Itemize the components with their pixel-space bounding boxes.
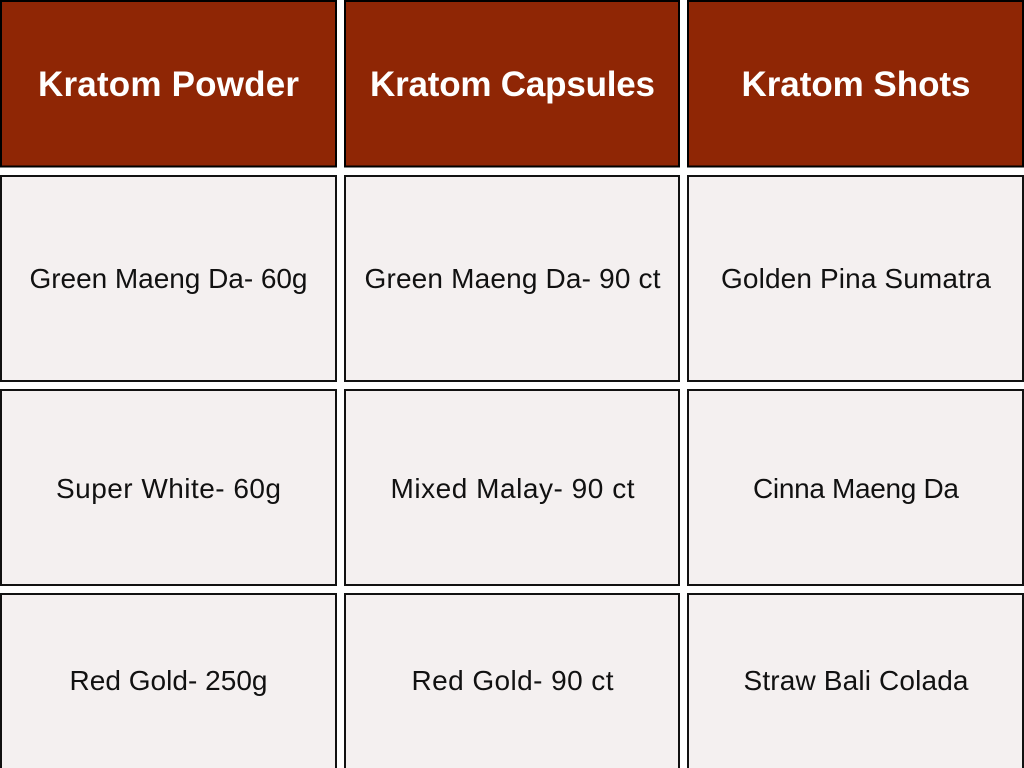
cell: Super White 60g: Super White- 60g	[56, 473, 281, 504]
cell: Green Maeng Da 60g: Green Maeng Da- 60g	[30, 263, 308, 294]
cell: Red Gold 250g: Red Gold- 250g	[70, 665, 268, 696]
cell: Straw Bali Colada	[688, 594, 1023, 768]
cell: Green Maeng Da 90 ct	[345, 176, 679, 381]
cell: Golden Pina Sumatra: Golden Pina Sumatra	[721, 263, 991, 294]
cell: Red Gold 90 ct	[345, 594, 679, 768]
header: Kratom Shots: Kratom Shots	[742, 65, 970, 104]
cell: Straw Bali Colada: Straw Bali Colada	[744, 665, 969, 696]
cell: Golden Pina Sumatra	[688, 176, 1023, 381]
cell: Green Maeng Da 60g	[1, 176, 336, 381]
cell: Mixed Malay 90 ct: Mixed Malay- 90 ct	[390, 473, 635, 504]
cell: Mixed Malay 90 ct	[345, 390, 679, 585]
cell: Super White 60g	[1, 390, 336, 585]
cell: Green Maeng Da 90 ct: Green Maeng Da- 90 ct	[364, 263, 661, 294]
header: Kratom Capsules: Kratom Capsules	[370, 65, 655, 104]
header: Kratom Powder: Kratom Powder	[38, 65, 299, 104]
header: Kratom Capsules	[345, 1, 679, 166]
cell: Red Gold 90 ct: Red Gold- 90 ct	[412, 665, 614, 696]
header: Kratom Shots	[688, 1, 1023, 166]
cell: Cinna Maeng Da	[688, 390, 1023, 585]
header: Kratom Powder	[1, 1, 336, 166]
cell: Red Gold 250g	[1, 594, 336, 768]
cell: Cinna Maeng Da: Cinna Maeng Da	[753, 473, 959, 504]
